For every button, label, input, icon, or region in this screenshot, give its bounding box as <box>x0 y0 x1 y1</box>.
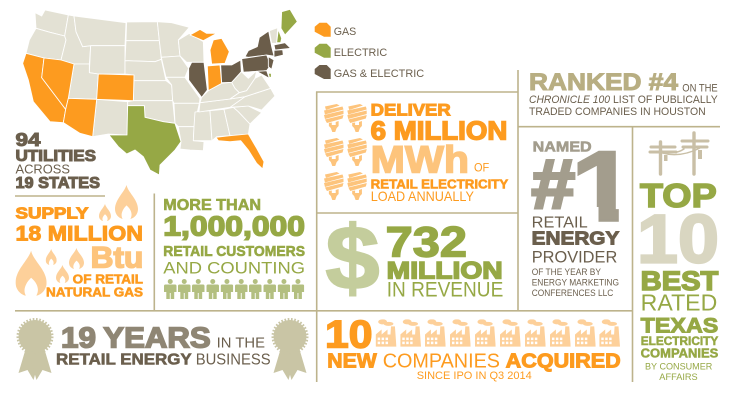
text: rated: RATED <box>641 290 717 316</box>
text: natural gas: NATURAL GAS <box>46 285 143 300</box>
map of United States <box>23 9 297 175</box>
text: retail energy: RETAIL ENERGY <box>56 351 192 368</box>
text: 19 states: 19 STATES <box>16 175 100 192</box>
text: in revenue: IN REVENUE <box>387 279 503 302</box>
unserved states in light grey <box>26 10 278 151</box>
stat: number 1: 1 <box>571 131 636 242</box>
panel: revenue <box>326 209 503 309</box>
text: of the year by: OF THE YEAR BY <box>532 267 602 278</box>
text: deliver: DELIVER <box>371 102 451 120</box>
stat: 94: 94 <box>16 129 41 150</box>
panel: top 10 <box>637 133 719 383</box>
legend icon: electric <box>315 44 331 58</box>
panel: retail customers <box>163 197 305 299</box>
icons: flames <box>16 185 138 296</box>
text: top: TOP <box>640 178 717 215</box>
text: and counting: AND COUNTING <box>163 258 305 277</box>
text: companies: COMPANIES <box>383 351 500 373</box>
text: supply: SUPPLY <box>16 206 89 222</box>
stat: 732: 732 <box>386 219 467 267</box>
text: affairs: AFFAIRS <box>659 372 698 383</box>
stat: 19: 19 <box>61 323 96 355</box>
panel: deliver 6 million MWh <box>324 102 509 204</box>
legend label: gas and electric: GAS & ELECTRIC <box>334 68 424 80</box>
icons: light bulbs <box>324 104 367 200</box>
text: traded companies in houston: TRADED COMPANIES IN HOUSTON <box>529 106 706 118</box>
stat: 10: 10 <box>325 314 372 357</box>
text: energy marketing: ENERGY MARKETING <box>532 277 619 288</box>
text: load annually: LOAD ANNUALLY <box>371 188 475 204</box>
icon: right award ribbon <box>273 320 307 380</box>
stat: 1,000,000: 1,000,000 <box>163 211 305 242</box>
legend icon: gas <box>315 23 331 37</box>
stat: hash sign: # <box>532 145 575 223</box>
unit: MWh: MWh <box>371 139 469 181</box>
text: chronicle 100 list: CHRONICLE 100 <box>529 94 611 106</box>
text: new: NEW <box>327 351 377 373</box>
text: of: OF <box>474 163 489 175</box>
panel: 19 years <box>18 320 307 380</box>
text: companies: COMPANIES <box>641 347 718 361</box>
text: of retail: OF RETAIL <box>73 271 143 286</box>
legend label: gas: GAS <box>334 26 356 38</box>
legend label: electric: ELECTRIC <box>334 47 387 59</box>
text: retail customers: RETAIL CUSTOMERS <box>163 244 305 260</box>
text: business: BUSINESS <box>196 351 271 368</box>
legend <box>315 23 424 80</box>
icon: power lines <box>650 133 708 174</box>
icon: left award ribbon <box>18 320 52 380</box>
panel: named #1 <box>532 131 639 299</box>
electric states in green <box>109 9 297 175</box>
text: retail electricity: RETAIL ELECTRICITY <box>371 176 509 191</box>
text: acquired: ACQUIRED <box>506 351 621 373</box>
text: provider: PROVIDER <box>532 249 617 267</box>
text: conferences llc: CONFERENCES LLC <box>532 288 613 299</box>
text: retail: RETAIL <box>532 215 588 232</box>
unit: Btu: Btu <box>91 241 143 274</box>
text: million: MILLION <box>387 258 503 285</box>
gas and electric states in dark brown <box>189 31 291 97</box>
text: list of publically: LIST OF PUBLICALLY <box>613 94 718 106</box>
text: since ipo: SINCE IPO IN Q3 2014 <box>417 370 532 382</box>
text: named: NAMED <box>533 140 592 156</box>
text: in the: IN THE <box>217 336 265 352</box>
text: by consumer: BY CONSUMER <box>645 361 712 372</box>
panel: acquisitions <box>325 314 621 382</box>
gas states in orange <box>23 29 264 169</box>
icons: row of people <box>164 279 304 299</box>
legend icon: gas and electric <box>315 65 331 79</box>
stat: 18 million: 18 MILLION <box>16 222 143 246</box>
heading: utilities: UTILITIES <box>16 148 96 165</box>
icon: dollar sign: $ <box>326 209 380 309</box>
text: across: ACROSS <box>16 162 70 177</box>
panel: utilities <box>16 129 100 192</box>
stat: 6 million: 6 MILLION <box>371 115 507 145</box>
text: texas: TEXAS <box>641 314 718 337</box>
text: more than: MORE THAN <box>163 197 261 214</box>
panel: ranked #4 <box>529 69 718 118</box>
text: energy: ENERGY <box>532 227 620 248</box>
text: best: BEST <box>641 266 719 296</box>
text: electricity: ELECTRICITY <box>641 334 718 348</box>
stat: 10: 10 <box>637 200 719 277</box>
icons: factories <box>376 319 620 347</box>
text: on the: ON THE <box>682 83 718 95</box>
heading: ranked #4: RANKED #4 <box>529 69 679 96</box>
heading: years: YEARS <box>103 323 211 355</box>
panel: natural gas supply <box>16 185 143 300</box>
